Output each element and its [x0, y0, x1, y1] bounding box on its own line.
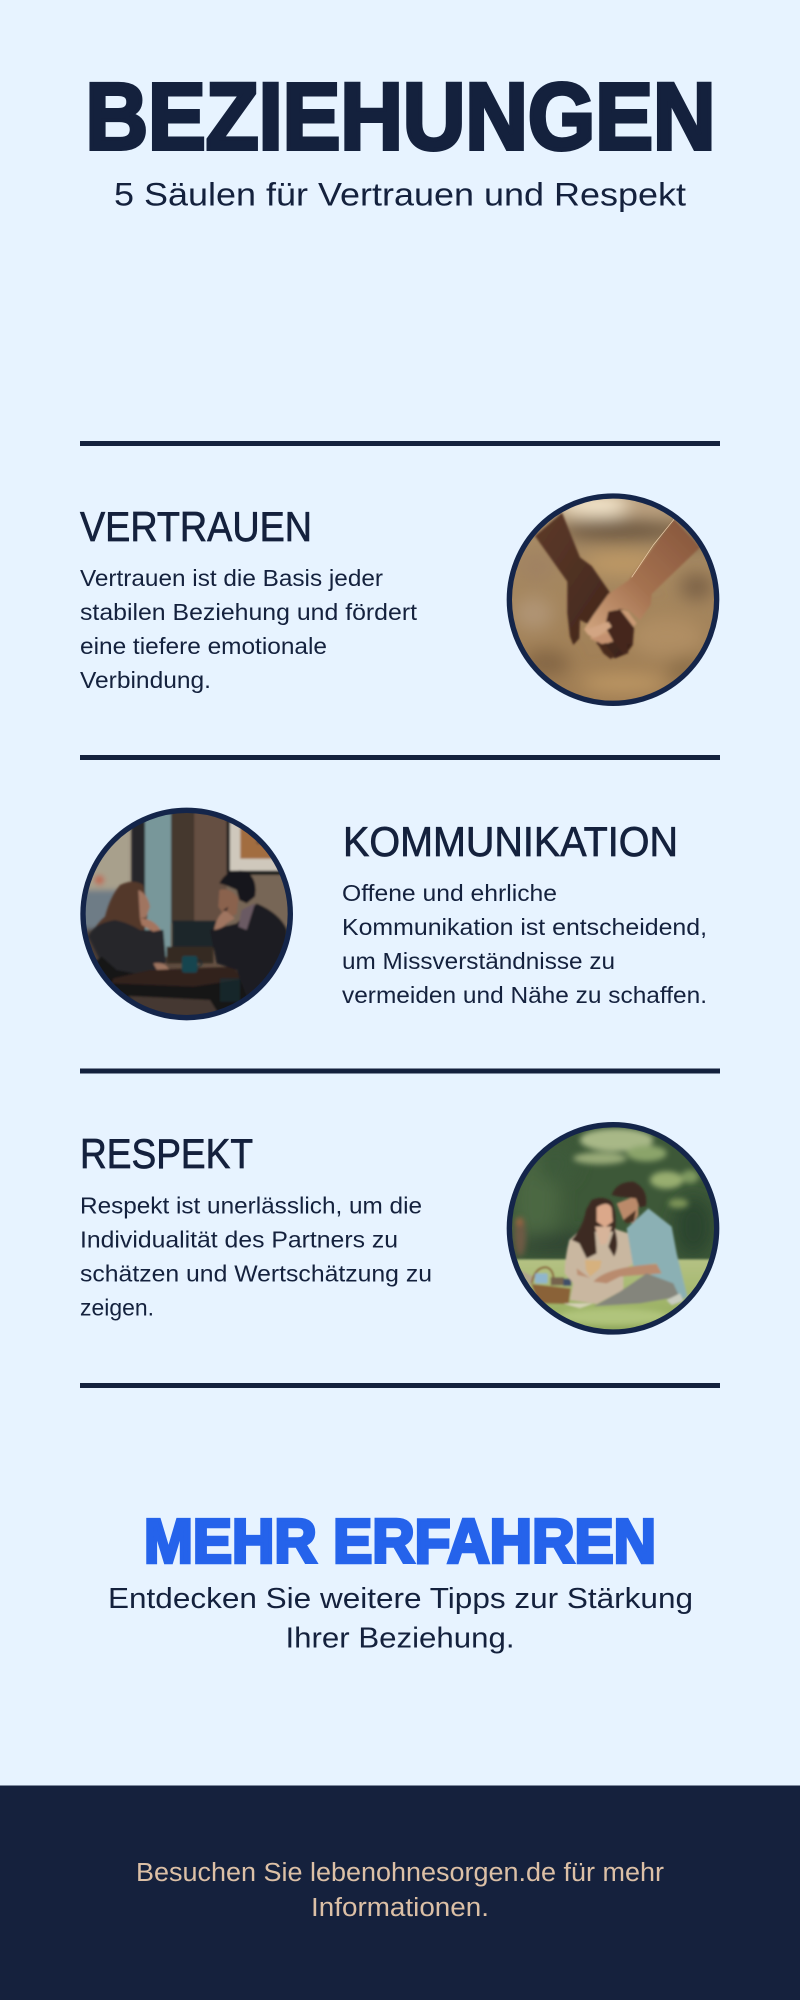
call to action — [108, 1508, 693, 1654]
panel: Respekt — [80, 1120, 720, 1336]
text block: Respekt: zeigen. — [80, 1294, 154, 1320]
left window — [86, 829, 133, 934]
photo: couple picnicking in a park — [507, 1120, 720, 1336]
text block: Vertrauen: stabilen Beziehung und fördert — [80, 599, 418, 625]
text block: Kommunikation: Kommunikation ist entscheidend, — [342, 914, 707, 940]
heading: Mehr erfahren: MEHR ERFAHREN — [144, 1508, 656, 1576]
footer — [0, 1786, 800, 2000]
text block: Vertrauen — [80, 565, 418, 693]
text block: Kommunikation: Offene und ehrliche — [342, 880, 557, 906]
footer text — [136, 1859, 665, 1922]
text block: Vertrauen: eine tiefere emotionale — [80, 633, 327, 659]
photo: holding hands — [507, 493, 720, 707]
text block: Kommunikation — [342, 880, 707, 1008]
subtitle: 5 Säulen für Vertrauen und Respekt — [114, 176, 686, 212]
header — [86, 64, 716, 212]
footer text: Informationen. — [311, 1894, 489, 1922]
text block: call to action: Ihrer Beziehung. — [286, 1622, 514, 1654]
title: BEZIEHUNGEN — [86, 64, 716, 170]
panel: Vertrauen — [80, 493, 720, 707]
heading: Kommunikation: KOMMUNIKATION — [343, 818, 678, 865]
heading: Vertrauen: VERTRAUEN — [80, 503, 312, 550]
text block: Kommunikation: vermeiden und Nähe zu schaffen. — [342, 982, 707, 1008]
footer background — [0, 1786, 800, 2000]
photo: couple talking in a cafe — [80, 807, 293, 1023]
heading: Respekt: RESPEKT — [80, 1130, 253, 1177]
footer text: Besuchen Sie lebenohnesorgen.de für mehr — [136, 1859, 665, 1887]
text block: call to action: Entdecken Sie weitere Tipps zur Stärkung — [108, 1583, 693, 1615]
text block: Respekt: Respekt ist unerlässlich, um die — [80, 1192, 422, 1218]
text block: Vertrauen: Vertrauen ist die Basis jeder — [80, 565, 383, 591]
text block: call to action — [108, 1583, 693, 1654]
panel: Kommunikation — [80, 807, 707, 1023]
text block: Respekt: Individualität des Partners zu — [80, 1226, 398, 1252]
text block: Kommunikation: um Missverständnisse zu — [342, 948, 615, 974]
text block: Vertrauen: Verbindung. — [80, 667, 211, 693]
text block: Respekt — [80, 1192, 432, 1320]
text block: Respekt: schätzen und Wertschätzung zu — [80, 1260, 432, 1286]
